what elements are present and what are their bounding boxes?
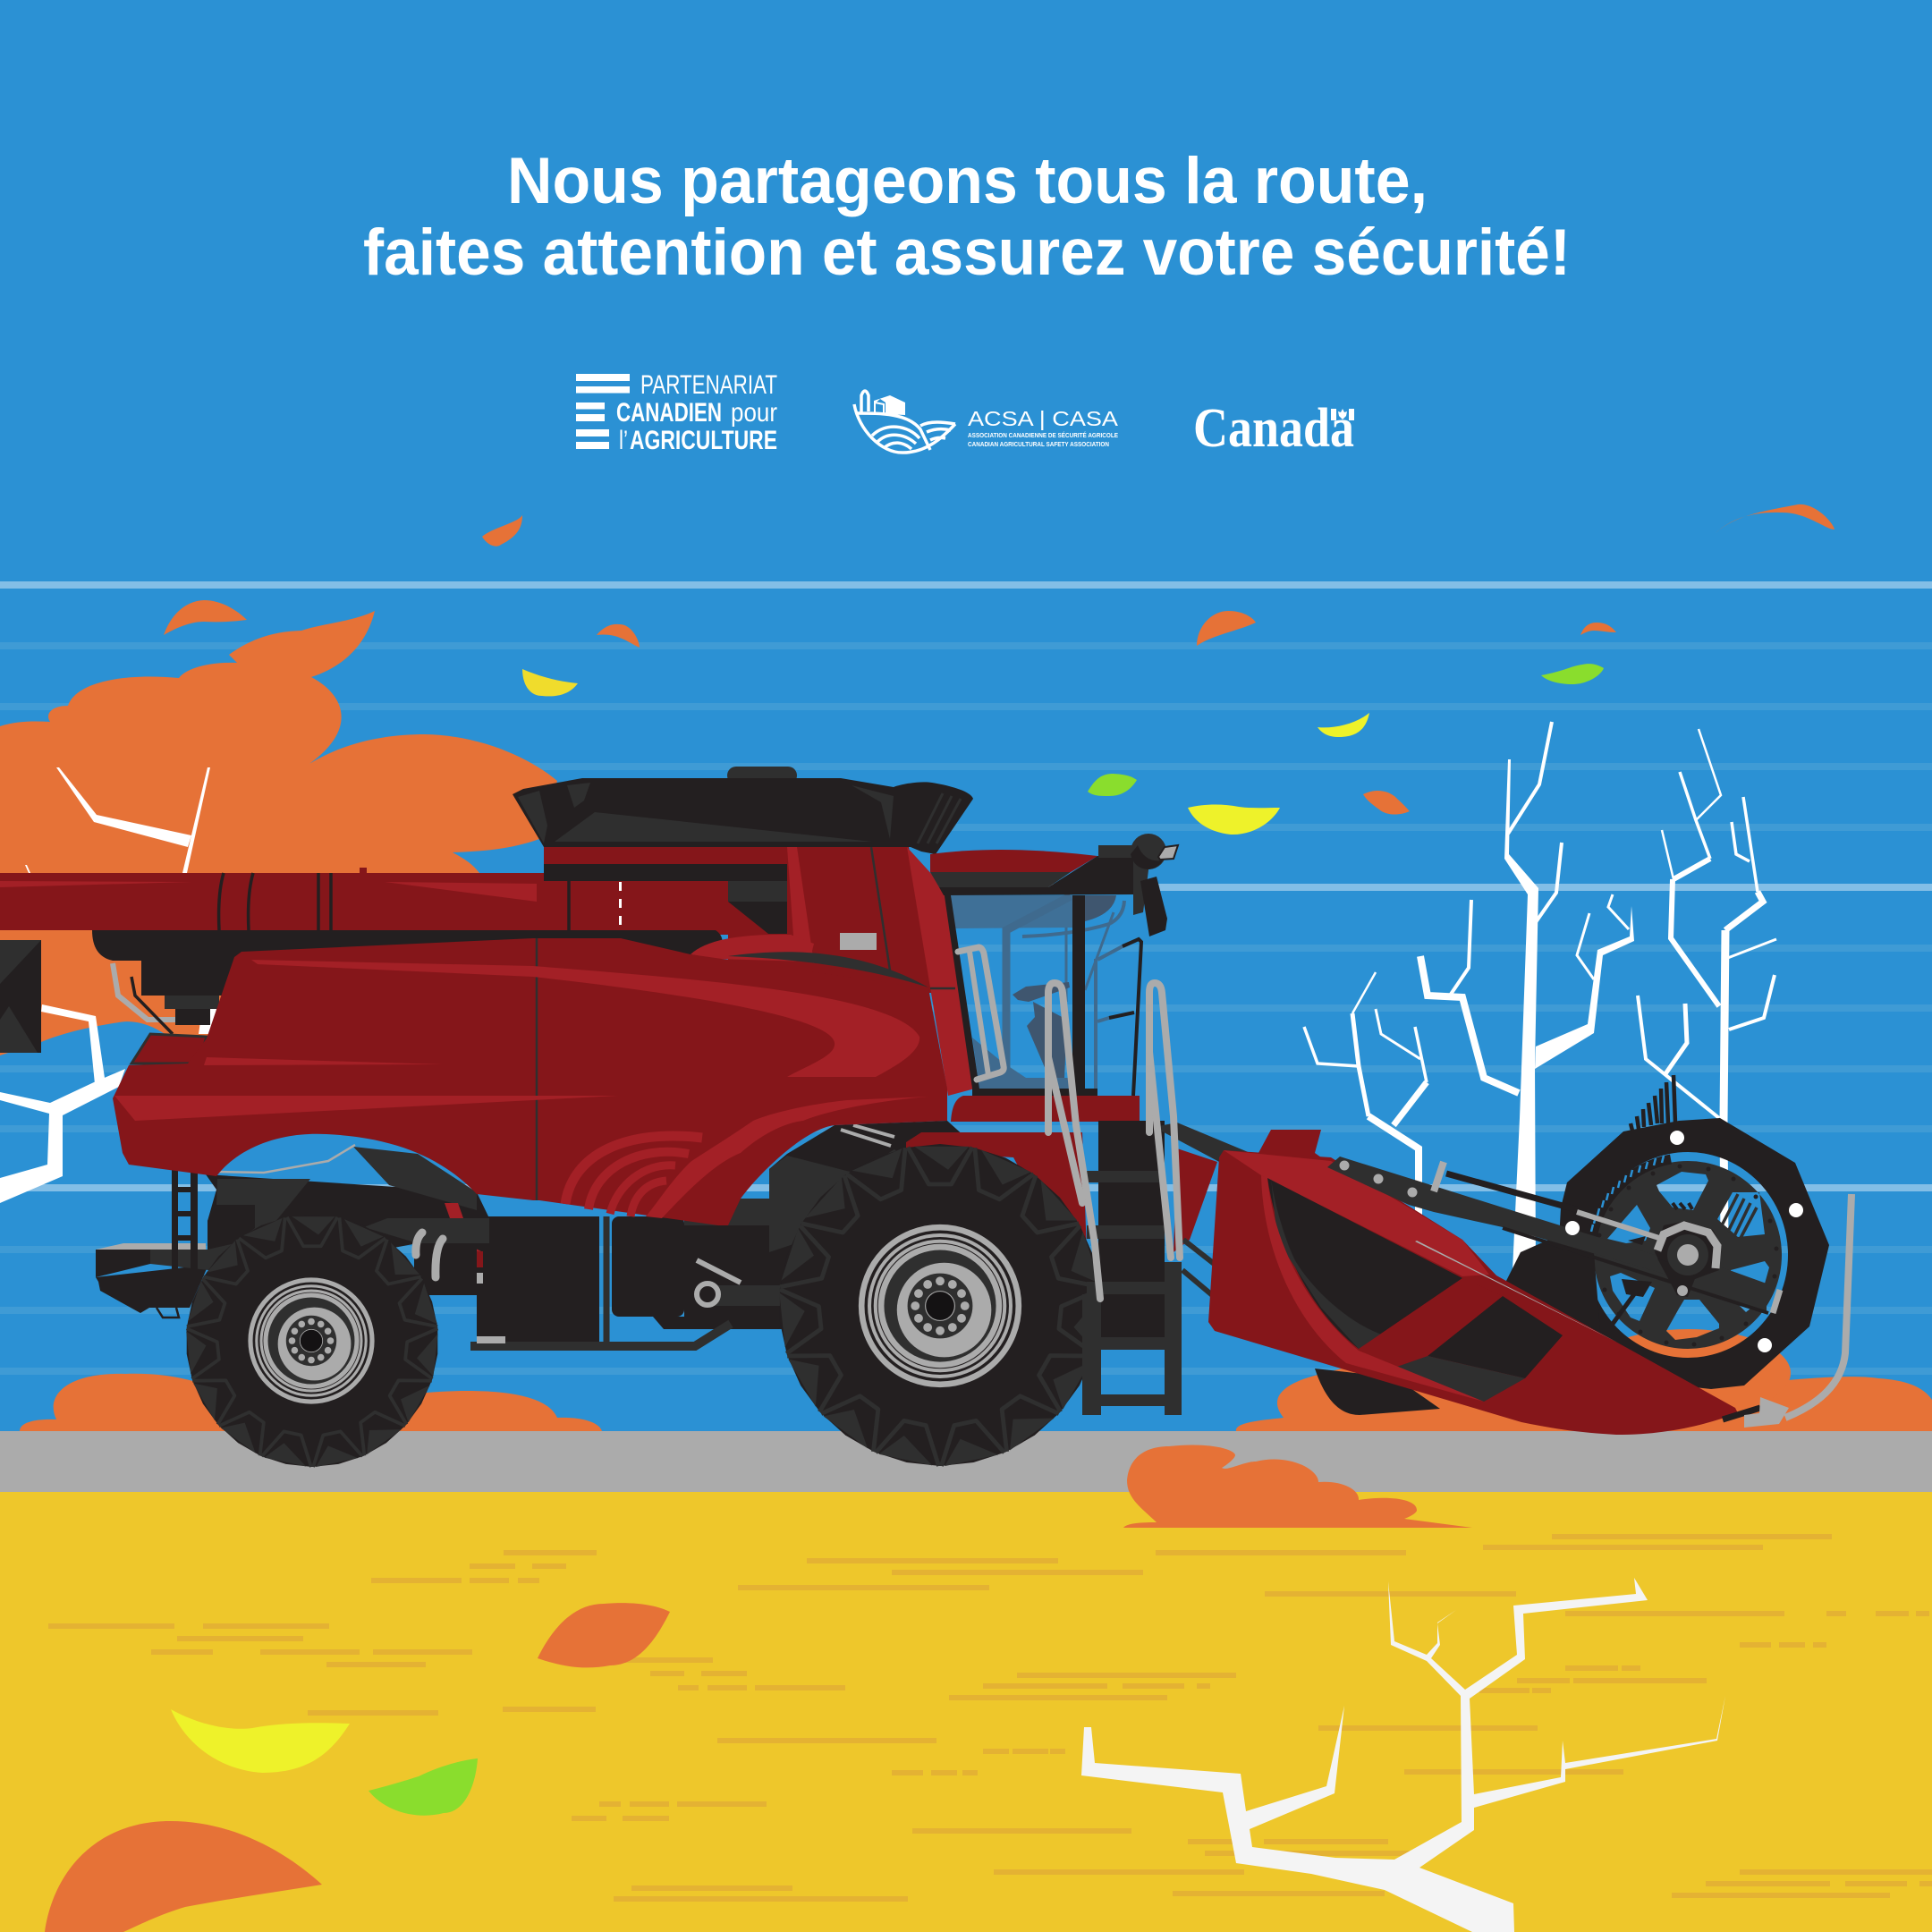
rear machinery xyxy=(92,930,723,1034)
leaf xyxy=(522,669,578,696)
leaves in field xyxy=(45,1603,670,1932)
orange foliage behind reel xyxy=(1585,1329,1791,1417)
grain tank tower xyxy=(544,847,975,1096)
logo: ACSA CASA: ACSA | CASA xyxy=(968,407,1119,430)
reel wheel xyxy=(1556,1075,1829,1389)
leaf xyxy=(171,1709,350,1773)
tree: right xyxy=(1638,729,1776,1243)
reel gear wheel with windows xyxy=(1594,1161,1782,1349)
corn header xyxy=(1208,1130,1738,1435)
tree: left xyxy=(1304,972,1427,1252)
front dark box xyxy=(0,940,41,1053)
ring hitch xyxy=(697,1284,718,1305)
handrails xyxy=(958,947,1180,1299)
cab xyxy=(930,834,1178,1122)
bare trees right xyxy=(1304,722,1776,1270)
reel toothed crescent xyxy=(1592,1159,1671,1238)
leaf xyxy=(1716,504,1835,533)
mirror xyxy=(1131,834,1178,869)
cab inner frame xyxy=(1006,896,1124,1089)
road xyxy=(0,1431,1932,1492)
logo: Partenariat canadien pour l'agriculture: pour xyxy=(731,398,777,428)
hull highlights xyxy=(251,960,919,1077)
leaf xyxy=(482,515,522,547)
orange ground foliage left xyxy=(20,1374,602,1431)
hull front lip xyxy=(131,1034,207,1063)
leaf xyxy=(1580,623,1616,635)
operator xyxy=(1013,982,1070,1078)
boom to header xyxy=(1154,1123,1252,1299)
leaf xyxy=(1188,804,1280,835)
cab left post xyxy=(944,890,979,1089)
orange bush on road xyxy=(1123,1445,1472,1528)
leaf xyxy=(1318,713,1369,737)
orange tree canopy left xyxy=(0,611,557,1055)
black link behind header xyxy=(1503,1234,1619,1377)
combine harvester xyxy=(0,767,1852,1468)
falling leaves in sky xyxy=(164,504,1835,835)
hull concentric arcs xyxy=(565,1136,702,1216)
tree: centre xyxy=(1420,722,1634,1270)
front step xyxy=(96,1243,239,1318)
leaf xyxy=(1363,791,1410,815)
header dark interior xyxy=(1267,1178,1462,1349)
cab platform xyxy=(972,1089,1097,1096)
logo: ACSA CASA: ASSOCIATION CANADIENNE DE SÉCURITÉ AGRICOLE xyxy=(968,431,1118,439)
title xyxy=(363,145,1571,289)
white tree in field xyxy=(1081,1578,1725,1932)
gray divider wand xyxy=(1723,1194,1852,1428)
field texture dashes xyxy=(48,1534,1932,1902)
title: Nous partageons tous la route, xyxy=(507,145,1428,217)
logo: Partenariat canadien pour l'agriculture: PARTENARIAT xyxy=(640,370,777,400)
logo: ACSA CASA xyxy=(854,391,1119,453)
yellow field xyxy=(0,1492,1932,1932)
hull xyxy=(113,938,947,1225)
reel ring bolts xyxy=(1597,1165,1778,1347)
auger xyxy=(0,864,732,936)
reel comb teeth xyxy=(1631,1075,1675,1131)
leaf xyxy=(1197,611,1256,646)
logo: Canada wordmark: Canada xyxy=(1193,398,1354,459)
logo: Partenariat canadien pour l'agriculture: CANADIEN xyxy=(616,398,722,428)
logo: Partenariat canadien pour l'agriculture: l’ xyxy=(619,426,628,455)
icon: farm in a bowl xyxy=(854,391,955,453)
header body xyxy=(1208,1150,1738,1435)
wheel: front small xyxy=(186,1215,438,1468)
reel white bolts xyxy=(1670,1131,1803,1352)
reel window details xyxy=(1613,1194,1757,1324)
hopper xyxy=(513,767,973,854)
cab roof xyxy=(930,850,1097,872)
orange ground foliage right xyxy=(1236,1368,1932,1431)
leaf xyxy=(45,1821,322,1932)
leaf xyxy=(597,624,640,648)
logo: Partenariat canadien pour l'agriculture: AGRICULTURE xyxy=(630,426,777,455)
sky background xyxy=(0,0,1932,1431)
white tree in canopy xyxy=(0,767,216,1203)
leaf xyxy=(164,600,247,635)
leaf xyxy=(1088,774,1137,796)
icon: flag xyxy=(1331,409,1354,420)
leaf xyxy=(538,1603,670,1667)
title: faites attention et assurez votre sécurité! xyxy=(363,216,1571,289)
ladder xyxy=(172,1165,198,1270)
undercarriage xyxy=(96,1145,801,1346)
leaf xyxy=(369,1758,478,1816)
leaf xyxy=(1541,664,1604,684)
wheel: rear large xyxy=(779,1144,1101,1467)
mirror arm xyxy=(1133,861,1167,936)
rear wheel arch and fender xyxy=(769,1121,1087,1252)
logo: Partenariat canadien pour l'agriculture xyxy=(576,370,777,455)
reel frame xyxy=(1556,1118,1829,1389)
stairs xyxy=(1082,1121,1182,1415)
sky stripes xyxy=(0,581,1932,1375)
hull body panel xyxy=(113,938,947,1225)
header arm and hub xyxy=(1327,1157,1780,1313)
reel hub xyxy=(1655,1221,1722,1297)
cab tinted glass xyxy=(951,895,1072,928)
logo: ACSA CASA: CANADIAN AGRICULTURAL SAFETY ASSOCIATION xyxy=(968,440,1109,448)
